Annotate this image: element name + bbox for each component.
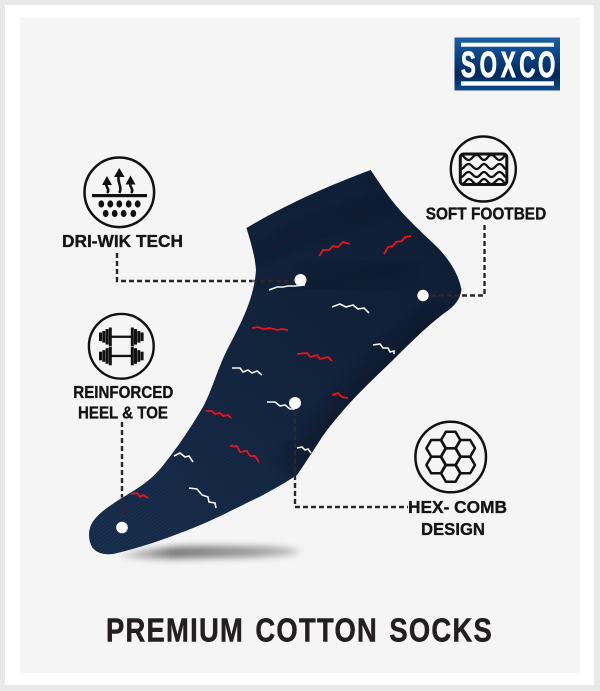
label: Reinforced Heel and Toe: HEEL & TOE <box>78 402 168 422</box>
label: Dri-Wik Tech: DRI-WIK TECH <box>62 231 183 251</box>
logo: SOXCO: SOXCO <box>461 46 555 85</box>
label: Hex-Comb Design: HEX- COMB <box>408 497 507 517</box>
icon: moisture wicking <box>84 158 154 227</box>
label: Soft Footbed: SOFT FOOTBED <box>426 204 546 224</box>
icon: mattress footbed <box>451 136 516 202</box>
label: Hex-Comb Design: DESIGN <box>421 519 485 539</box>
title: PREMIUM COTTON SOCKS <box>106 612 493 648</box>
white zigzag stitches <box>174 285 394 508</box>
icon: dumbbells <box>89 314 154 379</box>
connector: Dri-Wik Tech <box>117 253 306 286</box>
connector: Soft Footbed <box>417 225 484 301</box>
logo: SOXCO <box>454 38 560 90</box>
sock illustration <box>80 160 470 560</box>
sock shadow <box>118 546 301 559</box>
connector: Reinforced Heel and Toe <box>116 422 128 533</box>
connector: Hex-Comb Design <box>289 397 408 507</box>
icon: honeycomb <box>415 422 486 492</box>
red zigzag stitches <box>131 236 411 498</box>
label: Reinforced Heel and Toe: REINFORCED <box>73 382 173 402</box>
